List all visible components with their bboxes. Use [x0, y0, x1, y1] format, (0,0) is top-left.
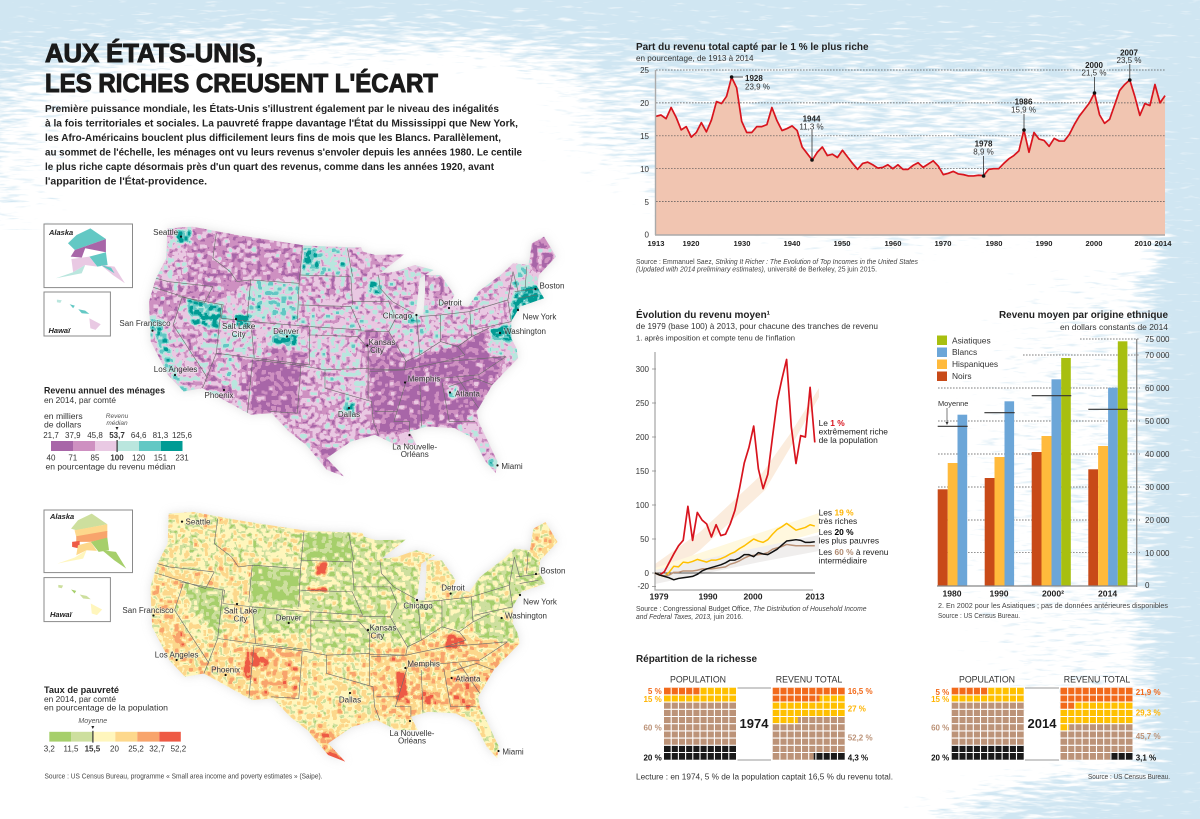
- callouts: key years: 23,9 %: [745, 82, 770, 92]
- year bracket: 1974: [740, 716, 769, 731]
- chart heading: en dollars constants de 2014: [1060, 322, 1168, 332]
- city labels: poverty map: City: [234, 614, 247, 624]
- percent labels: 20 %: [643, 753, 662, 762]
- city labels: income map: Chicago: [383, 312, 413, 320]
- legend: household income: 71: [68, 454, 78, 462]
- percent labels: 4,3 %: [848, 753, 868, 762]
- percent labels: 16,5 %: [848, 687, 873, 696]
- legend: household income: 37,9: [65, 431, 81, 440]
- chart source: [636, 606, 867, 621]
- city labels: income map: Miami: [501, 462, 523, 471]
- city labels: income map: [119, 228, 564, 471]
- title: LES RICHES CREUSENT L'ÉCART: [45, 69, 438, 98]
- legend: household income: 120: [132, 454, 146, 462]
- intro text block: l'apparition de l'État-providence.: [45, 174, 207, 188]
- legend: Noirs: [952, 371, 972, 381]
- city labels: poverty map: Salt Lake: [224, 606, 258, 616]
- chart source: (Updated with 2014 preliminary estimates), université de Berkeley, 25 juin 2015.: [636, 266, 877, 274]
- city labels: poverty map: New York: [523, 598, 558, 606]
- y axis labels: 20: [640, 99, 650, 108]
- lines: [655, 359, 815, 580]
- waffle panel: 2014: [931, 674, 1170, 781]
- x axis labels: [648, 239, 1172, 248]
- city labels: income map: Seattle: [153, 228, 179, 237]
- chart heading: Évolution du revenu moyen¹: [636, 308, 770, 321]
- y axis labels: 10 000: [1145, 549, 1170, 558]
- city labels: poverty map: Orléans: [398, 736, 426, 746]
- legend: household income: 64,6: [131, 431, 147, 440]
- x axis labels: 2000: [743, 592, 763, 602]
- city labels: poverty map: Dallas: [339, 696, 361, 704]
- legend: household income: 231: [175, 454, 189, 462]
- legend: household income: en pourcentage du revenu médian: [46, 462, 176, 472]
- y axis labels: 50: [640, 535, 650, 544]
- city labels: income map: Dallas: [338, 410, 360, 419]
- y axis labels: 100: [636, 501, 650, 510]
- legend: poverty rate: Moyenne: [78, 718, 107, 725]
- waffle panel: 1974: REVENU TOTAL: [776, 674, 842, 684]
- chart heading: [636, 308, 878, 343]
- city labels: poverty map: Chicago: [403, 602, 433, 610]
- waffle: population 1974: [664, 688, 736, 760]
- y axis labels: 20 000: [1145, 516, 1170, 525]
- intro text block: les Afro-Américains bouclent plus difficilement leurs fins de mois que les Blancs. Parallèlement,: [45, 132, 501, 144]
- footnote and source: 2. En 2002 pour les Asiatiques ; pas de données antérieures disponibles: [938, 601, 1168, 610]
- legend: poverty rate: 32,7: [149, 744, 165, 754]
- inset map: Alaska poverty: Alaska: [49, 512, 74, 521]
- legend: poverty rate: Taux de pauvreté: [44, 685, 119, 696]
- waffle panel: 2014: REVENU TOTAL: [1064, 674, 1130, 684]
- city labels: income map: Denver: [273, 327, 299, 336]
- city labels: income map: Memphis: [408, 374, 440, 384]
- legend: poverty rate: 3,2: [44, 744, 55, 754]
- callouts: key years: 1978: [975, 140, 993, 148]
- city labels: income map: Kansas: [369, 338, 395, 347]
- legend: household income: 40: [47, 454, 56, 462]
- y axis labels: 5: [645, 198, 650, 207]
- legend: household income: de dollars: [44, 420, 81, 430]
- chart source: Source : Congressional Budget Office, The Distribution of Household Income: [636, 606, 867, 613]
- city labels: income map: La Nouvelle-: [392, 442, 437, 452]
- city labels: income map: San Francisco: [119, 319, 171, 328]
- x axis labels: 1990: [989, 588, 1009, 598]
- y axis labels: 0: [645, 230, 650, 240]
- gridlines: [938, 339, 1140, 553]
- percent labels: 52,2 %: [848, 734, 873, 743]
- city labels: poverty map: Seattle: [186, 518, 211, 526]
- reading note: Lecture : en 1974, 5 % de la population captait 16,5 % du revenu total.: [636, 772, 893, 782]
- city labels: poverty map: Washington: [505, 612, 547, 620]
- chart: top 1% income share 1913-2014: [636, 41, 1172, 274]
- city labels: income map: Detroit: [438, 298, 463, 308]
- legend: Hispaniques: [952, 359, 998, 369]
- line labels: Le 1 %: [819, 418, 845, 428]
- inset map: Hawaii income: Hawaï: [48, 326, 71, 335]
- callouts: key years: 8,9 %: [973, 148, 994, 156]
- y axis labels: -20: [637, 582, 650, 591]
- percent labels: 29,3 %: [1136, 708, 1161, 717]
- legend: household income: Revenu: [106, 413, 129, 420]
- line labels: les plus pauvres: [819, 536, 879, 546]
- area and line: [655, 70, 1165, 235]
- percent labels: 60 %: [643, 724, 662, 733]
- chart source: Source : Emmanuel Saez, Striking It Richer : The Evolution of Top Incomes in the United States: [636, 259, 918, 266]
- callouts: key years: 1986: [1015, 98, 1033, 106]
- x axis labels: 1980: [942, 588, 962, 598]
- inset map: Alaska income: [44, 224, 132, 288]
- city labels: poverty map: City: [371, 632, 384, 640]
- chart heading: de 1979 (base 100) à 2013, pour chacune des tranches de revenu: [636, 321, 878, 331]
- legend: Blancs: [952, 347, 977, 357]
- year bracket: [1025, 688, 1059, 760]
- chart heading: Part du revenu total capté par le 1 % le plus riche: [636, 41, 869, 53]
- chart: income evolution by bracket 1979-2013: [636, 308, 889, 621]
- line labels: [819, 418, 889, 566]
- year bracket: [738, 688, 771, 760]
- x axis labels: 2000²: [1042, 588, 1064, 598]
- x axis labels: 1913: [648, 239, 664, 248]
- intro text block: au sommet de l'échelle, les ménages ont vu leurs revenus s'envoler depuis les années 1980. Le centile: [45, 146, 522, 158]
- percent labels: [643, 687, 873, 762]
- x axis labels: 2014: [1098, 588, 1117, 598]
- x axis labels: 2013: [805, 592, 825, 602]
- city labels: income map: City: [370, 346, 384, 355]
- waffle panel: 1974: POPULATION: [670, 674, 726, 684]
- percent labels: 45,7 %: [1136, 732, 1161, 741]
- y axis labels: 300: [636, 365, 650, 374]
- city labels: poverty map: Los Angeles: [155, 650, 198, 660]
- city labels: poverty map: Boston: [541, 566, 565, 576]
- legend: household income: 125,6: [172, 431, 193, 440]
- intro text block: Première puissance mondiale, les États-Unis s'illustrent également par le niveau des inégalités: [45, 102, 499, 115]
- legend: poverty rate: [44, 685, 187, 754]
- chart heading: [636, 41, 869, 63]
- city labels: income map: Atlanta: [455, 390, 481, 398]
- y axis labels: 200: [636, 433, 650, 442]
- y axis labels: 75 000: [1145, 335, 1170, 344]
- moyenne label and arrow: [938, 399, 968, 425]
- x axis labels: 1960: [885, 239, 901, 248]
- y axis labels: [636, 365, 650, 591]
- callouts: key years: 11,3 %: [799, 122, 824, 132]
- heading: wealth distribution: Répartition de la richesse: [636, 653, 757, 665]
- percent labels: 5 %: [936, 688, 949, 697]
- city labels: income map: Orléans: [401, 450, 429, 459]
- city labels: poverty map: Phoenix: [211, 666, 240, 674]
- inset map: Alaska income: Alaska: [48, 228, 73, 237]
- line labels: intermédiaire: [819, 556, 867, 566]
- waffle: total income 2014: [1060, 688, 1132, 760]
- y axis labels: 30 000: [1145, 483, 1170, 492]
- city labels: income map: Washington: [504, 327, 546, 336]
- y axis labels: 10: [640, 165, 650, 174]
- y axis labels: 70 000: [1145, 351, 1170, 360]
- x axis labels: 1980: [986, 239, 1002, 248]
- legend: household income: 53,7: [109, 431, 125, 440]
- map: household income by county: [120, 224, 564, 476]
- legend: poverty rate: 20: [110, 744, 119, 754]
- footnote and source: [938, 601, 1168, 620]
- x axis labels: [649, 592, 825, 602]
- percent labels: [931, 688, 1161, 763]
- callouts: key years: 2000: [1085, 61, 1103, 70]
- percent labels: 15 %: [643, 695, 662, 704]
- legend: household income: en milliers: [44, 411, 83, 421]
- trend bands: [655, 388, 819, 584]
- legend: household income: 21,7: [43, 431, 59, 440]
- intro text block: le plus riche capte désormais près d'un quart des revenus, comme dans les années 1920, avant: [45, 161, 494, 173]
- y axis labels: 15: [640, 132, 650, 141]
- title: AUX ÉTATS-UNIS,: [45, 39, 263, 68]
- map: poverty rate by county: [122, 510, 565, 762]
- legend: poverty rate: 25,2: [128, 744, 144, 754]
- inset map: Hawaii poverty: Hawaï: [50, 610, 73, 619]
- x axis labels: 1920: [683, 239, 699, 248]
- callouts: key years: 21,5 %: [1082, 68, 1106, 78]
- legend: household income: 45,8: [87, 431, 103, 440]
- x axis labels: 1979: [649, 592, 669, 602]
- legend: household income: 100: [110, 454, 124, 462]
- callouts: key years: 1944: [803, 114, 821, 124]
- city labels: income map: Salt Lake: [222, 322, 256, 331]
- callouts: key years: [730, 48, 1141, 178]
- legend: household income: en 2014, par comté: [44, 395, 116, 405]
- callouts: key years: 23,5 %: [1117, 56, 1141, 65]
- x axis labels: 2010: [1135, 239, 1151, 248]
- moyenne label and arrow: Moyenne: [938, 399, 968, 408]
- waffle panel: 2014: POPULATION: [959, 674, 1015, 684]
- x axis labels: 1970: [935, 239, 951, 248]
- legend: poverty rate: 15,5: [85, 744, 101, 754]
- x axis labels: [942, 588, 1117, 598]
- city labels: income map: New York: [523, 312, 557, 322]
- percent labels: 27 %: [848, 705, 866, 714]
- legend: household income: 81,3: [153, 431, 169, 440]
- y axis labels: 40 000: [1145, 450, 1170, 459]
- legend: household income: [43, 386, 193, 472]
- line labels: très riches: [819, 516, 857, 526]
- city labels: poverty map: La Nouvelle-: [390, 729, 435, 738]
- callouts: key years: 15,9 %: [1011, 106, 1036, 114]
- city labels: poverty map: Denver: [276, 614, 302, 622]
- waffle panel: 1974: [636, 674, 893, 782]
- legend: household income: Revenu annuel des ménages: [44, 386, 165, 396]
- y axis labels: 0: [645, 569, 650, 578]
- callouts: key years: 1928: [745, 74, 763, 83]
- legend: poverty rate: en 2014, par comté: [44, 694, 116, 704]
- line labels: extrêmement riche: [819, 426, 888, 436]
- y axis labels: [640, 66, 650, 240]
- bars: [938, 341, 1127, 586]
- title: [45, 39, 438, 98]
- legend: household income: 85: [91, 454, 100, 462]
- y axis labels: 60 000: [1145, 384, 1170, 393]
- waffle: population 2014: [952, 688, 1024, 760]
- x axis labels: 1990: [1036, 239, 1052, 248]
- intro text block: à la fois territoriales et sociales. La pauvreté frappe davantage l'État du Mississippi que New York,: [45, 116, 518, 130]
- percent labels: 15 %: [931, 695, 949, 704]
- average markers: [938, 396, 1128, 426]
- city labels: poverty map: Atlanta: [456, 674, 481, 684]
- line labels: de la population: [819, 435, 878, 445]
- city labels: income map: Boston: [540, 282, 564, 290]
- percent labels: 60 %: [931, 724, 949, 733]
- y axis labels: 150: [636, 467, 650, 476]
- year bracket: 2014: [1028, 716, 1057, 731]
- waffle: total income 1974: [773, 688, 845, 760]
- legend: poverty rate: 11,5: [64, 744, 79, 754]
- city labels: poverty map: [122, 518, 565, 756]
- chart source: [636, 259, 918, 274]
- legend: [937, 336, 998, 381]
- city labels: poverty map: San Francisco: [122, 606, 174, 615]
- y axis labels: 0: [1145, 581, 1150, 590]
- percent labels: 5 %: [648, 687, 662, 696]
- percent labels: 21,9 %: [1136, 688, 1161, 697]
- legend: poverty rate: 52,2: [171, 744, 187, 754]
- x axis labels: 1930: [734, 239, 750, 248]
- axes: [937, 339, 1137, 587]
- x axis labels: 1990: [698, 592, 718, 602]
- chart heading: Revenu moyen par origine ethnique: [999, 309, 1168, 321]
- intro text block: [45, 102, 522, 188]
- chart heading: [999, 309, 1168, 332]
- legend: poverty rate: en pourcentage de la population: [44, 702, 168, 712]
- city labels: income map: Los Angeles: [154, 365, 197, 374]
- city labels: poverty map: Detroit: [441, 584, 466, 592]
- chart: income by ethnic origin: [937, 309, 1170, 620]
- y axis labels: 50 000: [1145, 417, 1170, 426]
- line labels: Les 60 % à revenu: [819, 547, 889, 557]
- percent labels: 20 %: [931, 754, 949, 763]
- x axis labels: 1950: [834, 239, 850, 248]
- inset map: Alaska poverty: [44, 510, 132, 573]
- city labels: income map: City: [232, 330, 246, 339]
- y axis labels: [1145, 335, 1170, 590]
- footnote and source: Source : US Census Bureau.: [938, 613, 1020, 620]
- line labels: Les 20 %: [819, 527, 854, 537]
- axes: [652, 352, 815, 590]
- callouts: key years: 2007: [1120, 48, 1138, 58]
- chart source: and Federal Taxes, 2013, juin 2016.: [636, 614, 743, 621]
- x axis labels: 1940: [784, 239, 800, 248]
- y axis labels: 25: [640, 66, 650, 75]
- percent labels: 3,1 %: [1136, 754, 1156, 763]
- city labels: poverty map: Miami: [502, 748, 524, 756]
- inset map: Hawaii poverty: [44, 578, 110, 622]
- x axis labels: 2000: [1086, 239, 1102, 248]
- legend: household income: 151: [154, 454, 168, 462]
- city labels: poverty map: Memphis: [407, 660, 440, 668]
- legend: Asiatiques: [952, 336, 991, 346]
- y axis labels: 250: [636, 399, 650, 408]
- source: maps: Source : US Census Bureau, programme « Small area income and poverty estimates » (Saipe).: [44, 774, 323, 780]
- chart heading: en pourcentage, de 1913 à 2014: [636, 53, 754, 63]
- city labels: poverty map: Kansas: [370, 624, 396, 632]
- inset map: Hawaii income: [44, 292, 110, 336]
- x axis labels: 2014: [1155, 239, 1172, 248]
- chart heading: 1. après imposition et compte tenu de l'inflation: [636, 334, 795, 343]
- city labels: income map: Phoenix: [205, 391, 233, 400]
- source: Source : US Census Bureau.: [1088, 774, 1170, 781]
- legend: household income: médian: [106, 420, 128, 427]
- line labels: Les 19 %: [819, 508, 854, 518]
